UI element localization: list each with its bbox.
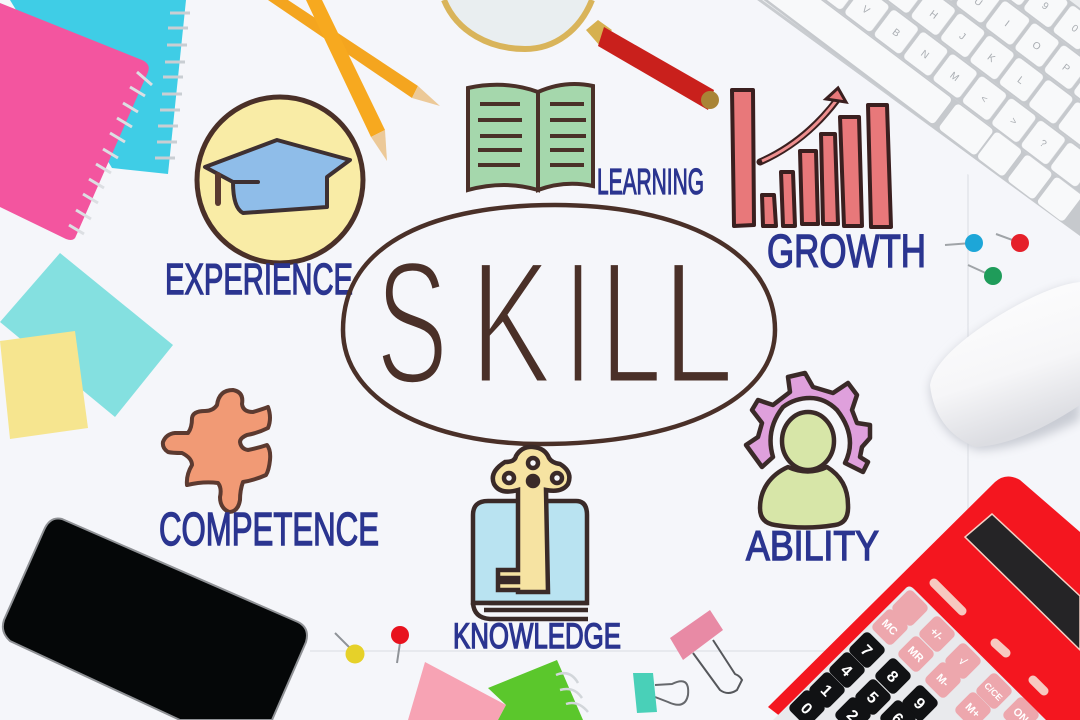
keyboard: ? <box>1037 138 1049 150</box>
title: skill: L <box>600 226 662 421</box>
push pins right <box>945 234 1029 285</box>
calculator: MC <box>879 617 900 638</box>
keyboard: 0 <box>1069 23 1080 35</box>
title: skill: S <box>376 226 448 421</box>
keyboard: I <box>1002 19 1011 29</box>
icon: puzzle piece <box>163 390 270 512</box>
keyboard: 9 <box>1039 1 1051 13</box>
bottom green notebook <box>488 660 588 720</box>
icon: person with gear <box>746 373 870 528</box>
keyboard: L <box>1015 75 1026 87</box>
calculator: 4 <box>837 662 855 680</box>
calculator: √ <box>956 655 969 669</box>
calculator <box>768 476 1080 720</box>
bar chart: growth <box>732 88 891 227</box>
keyboard: V <box>859 4 872 17</box>
title: skill: K <box>470 226 552 421</box>
keyboard: H <box>927 9 939 22</box>
icon: open book <box>468 84 593 190</box>
keyboard: P <box>1060 62 1072 75</box>
keyboard: K <box>985 52 997 65</box>
keyboard: > <box>1008 116 1019 128</box>
binder clip: pink <box>670 610 742 693</box>
keyboard: N <box>918 48 931 62</box>
calculator: 5 <box>863 689 881 707</box>
label: learning: LEARNING <box>597 161 704 202</box>
keyboard: < <box>978 93 989 106</box>
pencils <box>268 0 440 161</box>
calculator: +/- <box>927 626 945 644</box>
calculator: 7 <box>857 642 875 660</box>
keyboard: B <box>890 27 902 40</box>
keyboard: J <box>957 31 967 43</box>
binder clip: teal <box>633 673 688 713</box>
calculator: M- <box>934 672 951 690</box>
pink notebook <box>0 3 152 240</box>
keyboard: O <box>1030 40 1043 53</box>
growth arrow <box>760 88 846 162</box>
keyboard: M <box>947 70 961 84</box>
central rounded outline <box>343 205 775 444</box>
calculator: 1 <box>817 682 835 700</box>
phone <box>3 518 307 720</box>
calculator: 0 <box>797 700 815 718</box>
label: growth: GROWTH <box>767 225 926 277</box>
icon: graduation cap in circle <box>197 97 363 263</box>
icon: key on book <box>473 447 588 619</box>
title: skill: L <box>662 226 734 421</box>
calculator: 8 <box>883 668 901 686</box>
magnifying glass <box>442 0 719 110</box>
calculator: M+ <box>963 701 982 720</box>
label: ability: ABILITY <box>746 522 879 569</box>
cyan notebook <box>10 0 190 174</box>
calculator: 9 <box>910 695 928 713</box>
bottom pink sticky note <box>408 662 506 720</box>
calculator: C/CE <box>982 681 1004 703</box>
label: experience: EXPERIENCE <box>165 255 353 304</box>
label: knowledge: KNOWLEDGE <box>453 617 621 656</box>
mouse <box>930 282 1080 450</box>
sticky notes <box>0 253 173 439</box>
label: competence: COMPETENCE <box>159 503 379 555</box>
calculator: MR <box>905 644 926 665</box>
title: skill: I <box>564 226 592 421</box>
title: skill <box>376 226 734 421</box>
keyboard <box>603 0 1080 378</box>
bottom pins <box>335 626 409 664</box>
